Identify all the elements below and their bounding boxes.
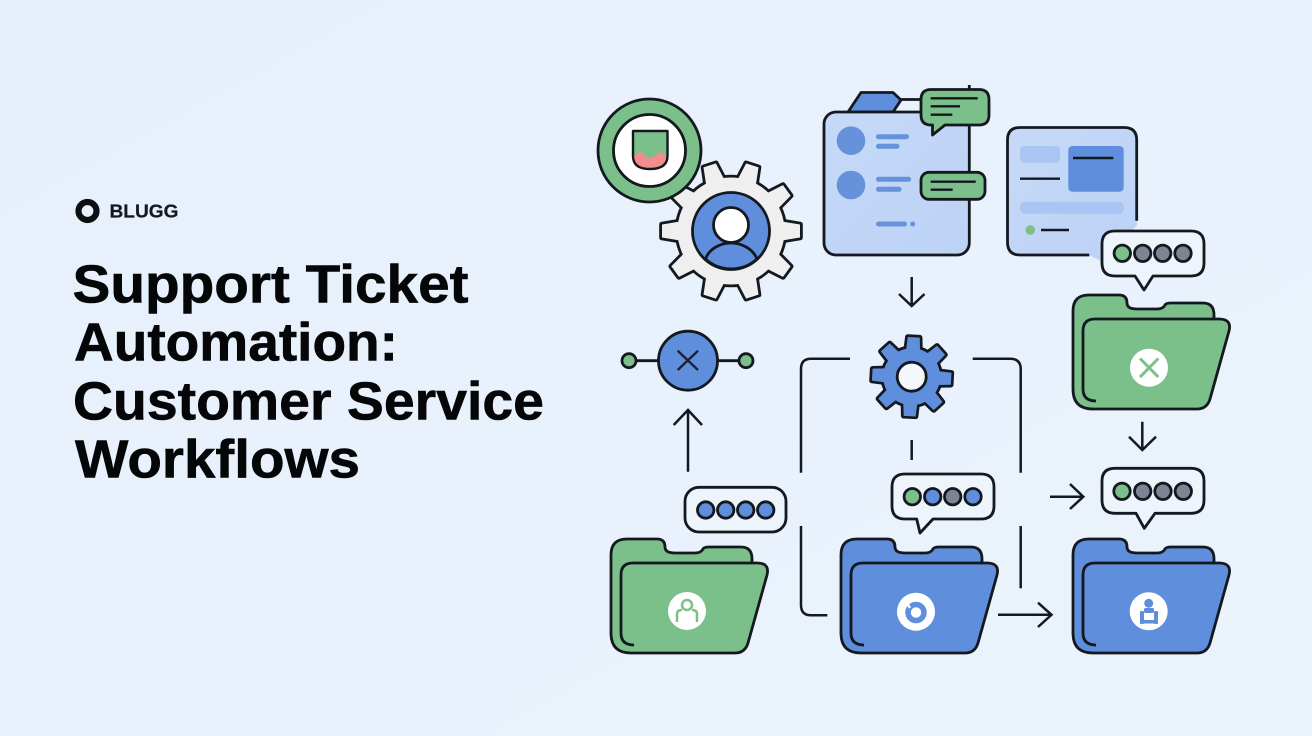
arrow: right to right bubble (1050, 484, 1083, 509)
icon: x badge (1130, 349, 1168, 387)
chat pill: blue dots (685, 487, 786, 532)
connector: right bracket lower (1019, 526, 1022, 588)
chat bubble: center mixed dots (892, 474, 994, 533)
title: Support Ticket (72, 256, 469, 315)
title: Customer Service (73, 372, 544, 431)
folder: green with x (1073, 295, 1230, 409)
connector: gear stem (910, 440, 913, 460)
icon: green badge (598, 99, 701, 202)
icon: document tab (848, 92, 901, 112)
avatars and text rows (837, 126, 915, 226)
chat bubble: three lines (921, 90, 989, 135)
connector: left bracket lower (801, 526, 827, 615)
connector: left bracket upper (801, 359, 850, 473)
connector: right bracket upper (973, 359, 1021, 473)
icon: logo ring (78, 202, 96, 220)
icon: person badge (668, 592, 706, 630)
icon: person badge (1130, 592, 1168, 630)
title: Workflows (75, 431, 360, 490)
panel: ticket document (824, 85, 989, 255)
panel: dashboard card (1007, 128, 1137, 262)
title (72, 256, 544, 490)
folder: blue with person (1073, 539, 1230, 653)
arrow: down to right bubble (1129, 422, 1156, 450)
icon: ring badge (897, 593, 935, 631)
arrow: up to x node (674, 410, 702, 472)
folder: blue with ring (841, 539, 998, 653)
arrow: right to blue folder (998, 603, 1052, 627)
icon: center blue gear (870, 335, 953, 418)
arrow: down to top of center gear (899, 277, 924, 306)
chat bubble: status dots top right (1102, 231, 1204, 290)
node: x circle with connectors (622, 331, 753, 390)
brand name: BLUGG (110, 200, 178, 222)
folder: green with person (611, 539, 768, 653)
title: Automation: (74, 314, 398, 373)
chat bubble: right dots (1102, 468, 1204, 528)
icon: large gear with user (662, 162, 800, 300)
chat bubble: two lines (921, 172, 985, 199)
logo: BLUGG (78, 200, 178, 222)
